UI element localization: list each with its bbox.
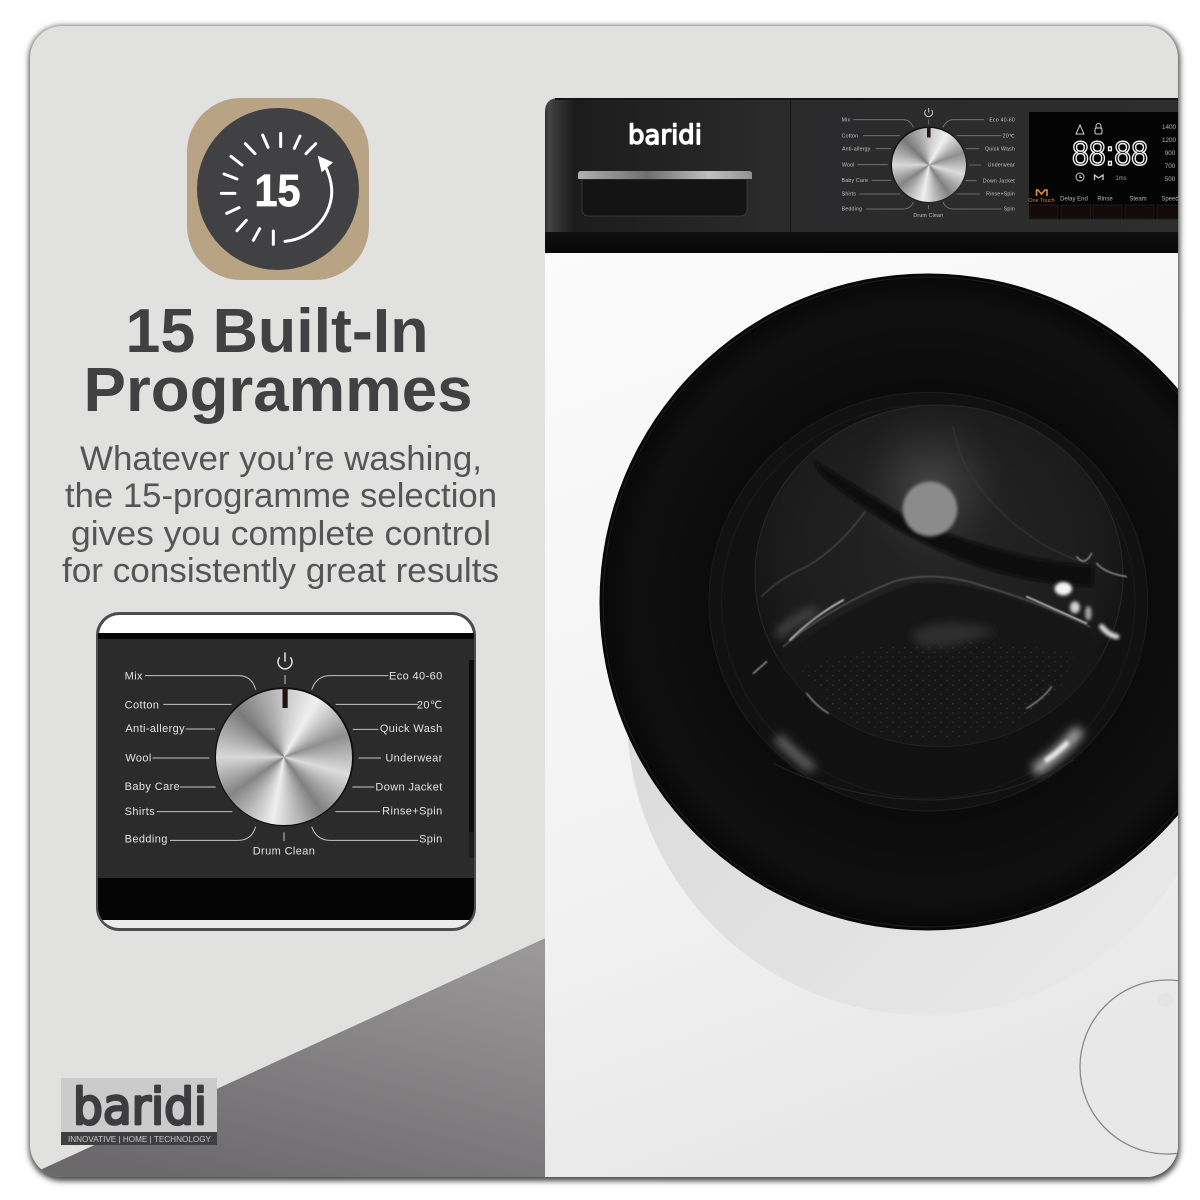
dial labels: Down Jacket [375,782,443,794]
description: the 15-programme selection [65,477,497,515]
display: 1ms [1115,176,1127,182]
icon: 15 programmes timer [187,98,369,280]
program dial labels: Mix [842,118,851,124]
panel: dial close-up [96,614,476,930]
program dial labels: Rinse+Spin [986,192,1015,198]
button labels: Speed [1161,196,1179,202]
control panel [545,98,1182,253]
door ring [600,274,1200,930]
dial labels: Quick Wash [380,723,443,735]
drum perforations [800,642,1073,739]
service hatch [1079,979,1178,1155]
program dial labels: Wool [842,162,855,168]
program dial labels [842,108,1015,219]
program dial labels: Anti-allergy [842,146,871,152]
spin speeds: 1200 [1162,137,1176,144]
program dial labels: Down Jacket [983,178,1015,184]
dial labels: Wool [125,752,152,764]
icon: power [278,652,292,669]
icon: power [925,108,933,117]
door glass [709,392,1148,811]
digital time: 88:88 [1072,135,1148,173]
dial labels: 20℃ [417,699,443,711]
panel brand logo: baridi [628,120,702,151]
program dial labels: Quick Wash [985,146,1015,152]
button labels [1028,196,1178,202]
description: for consistently great results [62,552,499,590]
spin speeds: 900 [1165,150,1176,157]
icon number: 15 [254,165,300,216]
program dial knob [891,126,967,202]
dial labels: Anti-allergy [125,723,185,735]
dial knob [215,687,354,826]
dial labels: Bedding [125,834,168,846]
program dial labels: 20℃ [1003,133,1015,139]
dial labels: Baby Care [125,781,180,793]
description [62,440,499,590]
buttons [1030,205,1182,219]
dial labels: Mix [125,670,143,682]
program dial labels: Bedding [842,207,862,213]
spin speeds: 1400 [1162,124,1176,131]
program dial labels: Cotton [842,133,858,139]
glare spot [903,482,957,536]
dial labels: Spin [419,834,443,846]
description: gives you complete control [71,515,491,553]
button labels: Delay End [1060,196,1088,202]
program dial labels: Drum Clean [913,213,943,219]
dial labels: Eco 40-60 [389,670,443,682]
grey diagonal wedge [40,936,550,1180]
title: 15 Built-In [126,297,428,366]
glare halo [880,433,984,532]
spin speeds: 500 [1165,176,1176,183]
program dial labels: Shirts [842,192,856,198]
dial labels [125,652,443,858]
dial labels: Shirts [125,806,155,818]
button labels: Steam [1129,196,1147,202]
status icons [1076,124,1103,181]
door shadow [628,736,973,1004]
drum centre reflection [910,623,997,647]
title [84,297,472,425]
button labels: One Touch [1028,198,1055,204]
spin speeds [1162,124,1176,183]
display [1028,112,1182,219]
bright highlights [1055,582,1072,595]
icon: one touch [1036,190,1047,196]
title: Programmes [84,356,472,425]
program dial labels: Spin [1004,207,1015,213]
drum lower section [778,583,1098,746]
program dial labels: Underwear [988,163,1015,169]
washing machine [545,98,1200,1180]
dial labels: Rinse+Spin [382,806,443,818]
program dial labels: Eco 40-60 [989,118,1015,124]
dial labels: Drum Clean [253,846,315,858]
program dial labels: Baby Care [842,178,868,184]
reflections [753,427,1127,800]
dial labels: Underwear [385,753,443,765]
description: Whatever you’re washing, [80,440,482,478]
brand logo: baridi [73,1078,207,1136]
tagline: INNOVATIVE | HOME | TECHNOLOGY [68,1134,211,1144]
button labels: Rinse [1097,196,1113,202]
spin speeds: 700 [1165,163,1176,170]
door [600,274,1200,930]
dark band [813,460,1093,587]
detergent drawer handle [578,171,752,216]
dial labels: Cotton [125,699,159,711]
machine body [545,250,1185,1180]
